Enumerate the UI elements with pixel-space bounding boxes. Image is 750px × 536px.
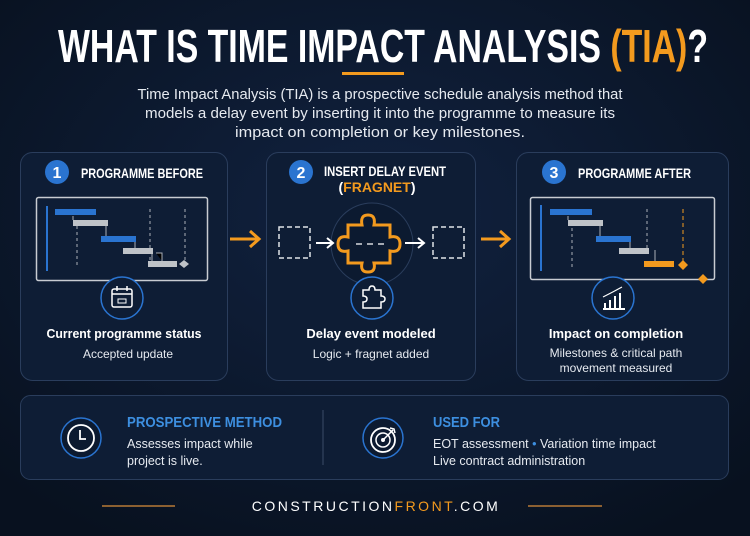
fragnet diagram	[279, 203, 464, 285]
panel: programme before: PROGRAMME BEFORE	[81, 165, 203, 181]
panel: insert delay event: (FRAGNET)	[338, 179, 416, 195]
bottom panel: Live contract administration	[433, 454, 585, 468]
panel: programme after: PROGRAMME AFTER	[578, 165, 691, 181]
gantt chart: before	[36, 198, 208, 280]
subtitle: Time Impact Analysis (TIA) is a prospective schedule analysis method that	[138, 86, 623, 103]
bottom panel	[20, 396, 728, 480]
panel: programme before	[20, 152, 228, 380]
bottom panel: Assesses impact while	[127, 437, 253, 451]
icon: clock	[61, 418, 101, 458]
bottom panel: PROSPECTIVE METHOD	[127, 414, 282, 431]
subtitle	[138, 86, 623, 141]
icon: calendar	[101, 277, 143, 319]
panel: programme before: 1	[53, 165, 62, 182]
bottom panel: USED FOR	[433, 414, 500, 431]
footer: CONSTRUCTIONFRONT.COM	[252, 498, 500, 514]
panel: programme after: Impact on completion	[549, 326, 683, 341]
gantt chart: after	[530, 198, 714, 284]
arrow	[481, 231, 509, 247]
icon: puzzle	[351, 277, 393, 319]
arrow	[230, 231, 259, 247]
panel: insert delay event: 2	[297, 165, 306, 182]
panel: programme before: Current programme status	[46, 326, 202, 341]
panel: insert delay event: Delay event modeled	[306, 326, 436, 341]
bottom panel: project is live.	[127, 454, 203, 468]
subtitle: models a delay event by inserting it into the programme to measure its	[145, 105, 615, 122]
panel: programme before: Accepted update	[83, 347, 173, 361]
icon: target	[363, 418, 403, 458]
panel: insert delay event: INSERT DELAY EVENT	[324, 163, 446, 179]
panel: programme after: 3	[550, 165, 559, 182]
icon: chart	[592, 277, 634, 319]
panel: programme after: Milestones & critical path	[550, 346, 682, 360]
panel: insert delay event: Logic + fragnet added	[313, 347, 429, 361]
panel: insert delay event	[266, 152, 476, 380]
panel: programme after	[516, 152, 728, 380]
panel: programme after: movement measured	[560, 361, 672, 375]
subtitle: impact on completion or key milestones.	[235, 124, 525, 141]
bottom panel: EOT assessment • Variation time impact	[433, 437, 656, 451]
